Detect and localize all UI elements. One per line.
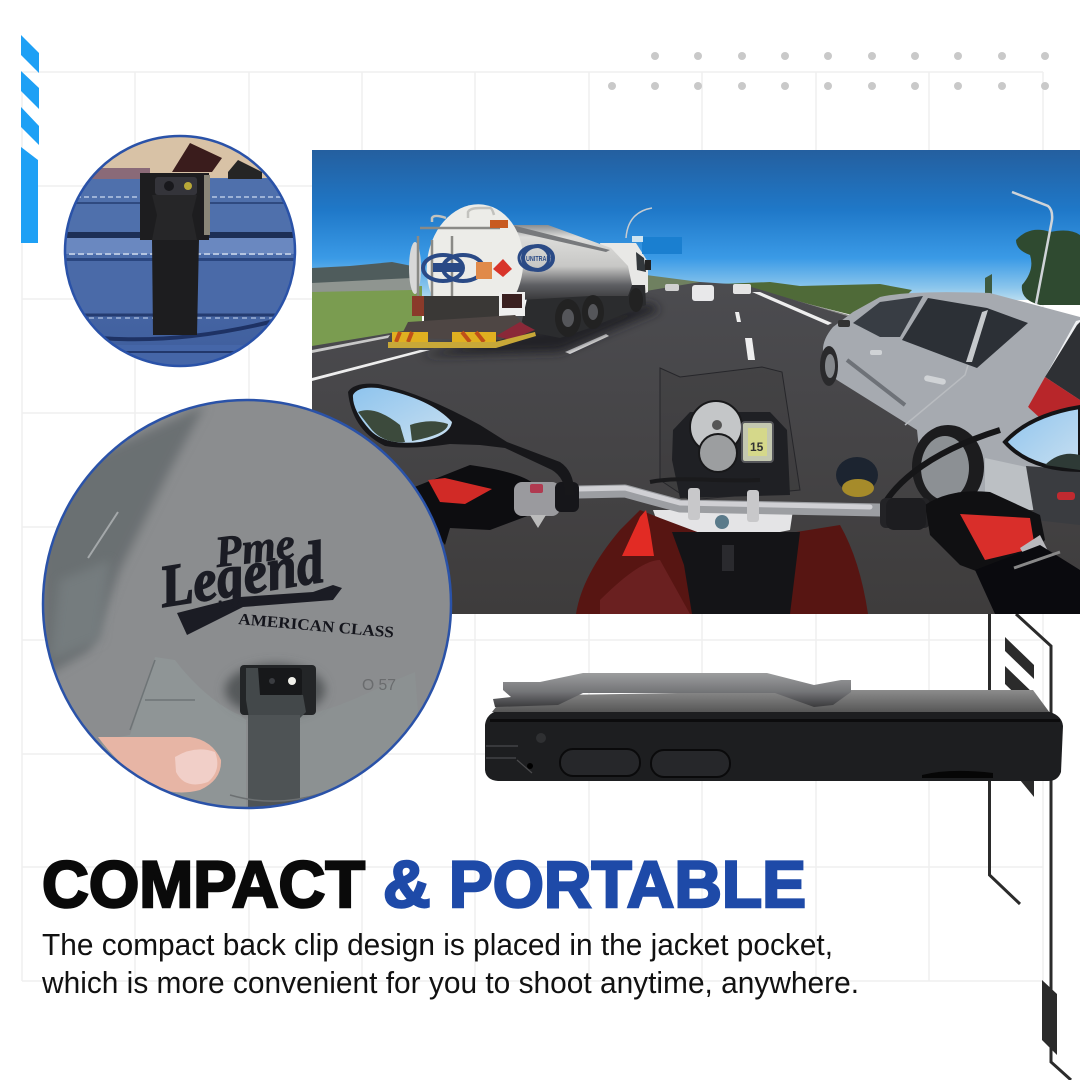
- pocket: [100, 657, 246, 807]
- description text: which is more convenient for you to shoot anytime, anywhere.: [41, 965, 859, 1000]
- fingertip: [98, 737, 221, 792]
- tanker truck: [388, 198, 660, 356]
- description text: The compact back clip design is placed in the jacket pocket,: [42, 927, 833, 962]
- title: COMPACT: [42, 847, 365, 921]
- sky: [312, 150, 1080, 300]
- small circle: camera clipped on denim pocket: [60, 130, 300, 370]
- card slot: [922, 771, 993, 778]
- button two: [651, 750, 730, 777]
- dark tech line decoration: [990, 610, 1071, 1080]
- road photo: motorcycle riding view: [312, 150, 1080, 614]
- logo: [162, 536, 393, 638]
- road surface: [312, 282, 1080, 614]
- handlebar and dash: [578, 401, 1000, 536]
- right glove: [886, 491, 1080, 614]
- description text: [41, 927, 859, 1000]
- large circle: camera in shirt pocket: O 57: [362, 677, 396, 694]
- title: & PORTABLE: [383, 847, 806, 921]
- title: [42, 847, 806, 921]
- blue striped accent bar: [21, 35, 39, 243]
- right mirror: [1005, 407, 1080, 470]
- roadside landscape: [312, 192, 1080, 346]
- handlebar and dash: 15: [750, 440, 764, 454]
- top plate: [492, 690, 1050, 713]
- left mirror: [348, 384, 573, 482]
- device body: [485, 712, 1063, 781]
- clip camera: [240, 665, 316, 807]
- highway sign: [632, 236, 682, 254]
- microphone and indicator: [486, 733, 546, 773]
- logo: Pme: [211, 519, 298, 577]
- logo: AMERICAN CLASS: [238, 611, 395, 642]
- distant cars: [692, 285, 714, 301]
- product: camera side view with back clip: [485, 673, 1063, 781]
- clip camera: [140, 173, 210, 335]
- dot pattern: [608, 52, 1049, 90]
- button one: [560, 749, 640, 776]
- logo: Legend: [154, 529, 329, 620]
- silver car: [820, 292, 1080, 525]
- tanker truck: UNITRANS: [526, 256, 554, 263]
- motorcycle tank: [576, 510, 868, 614]
- windshield: [660, 367, 800, 500]
- metal back clip: [493, 673, 851, 707]
- large circle: camera in shirt pocket: [40, 400, 460, 820]
- left glove: [412, 465, 579, 545]
